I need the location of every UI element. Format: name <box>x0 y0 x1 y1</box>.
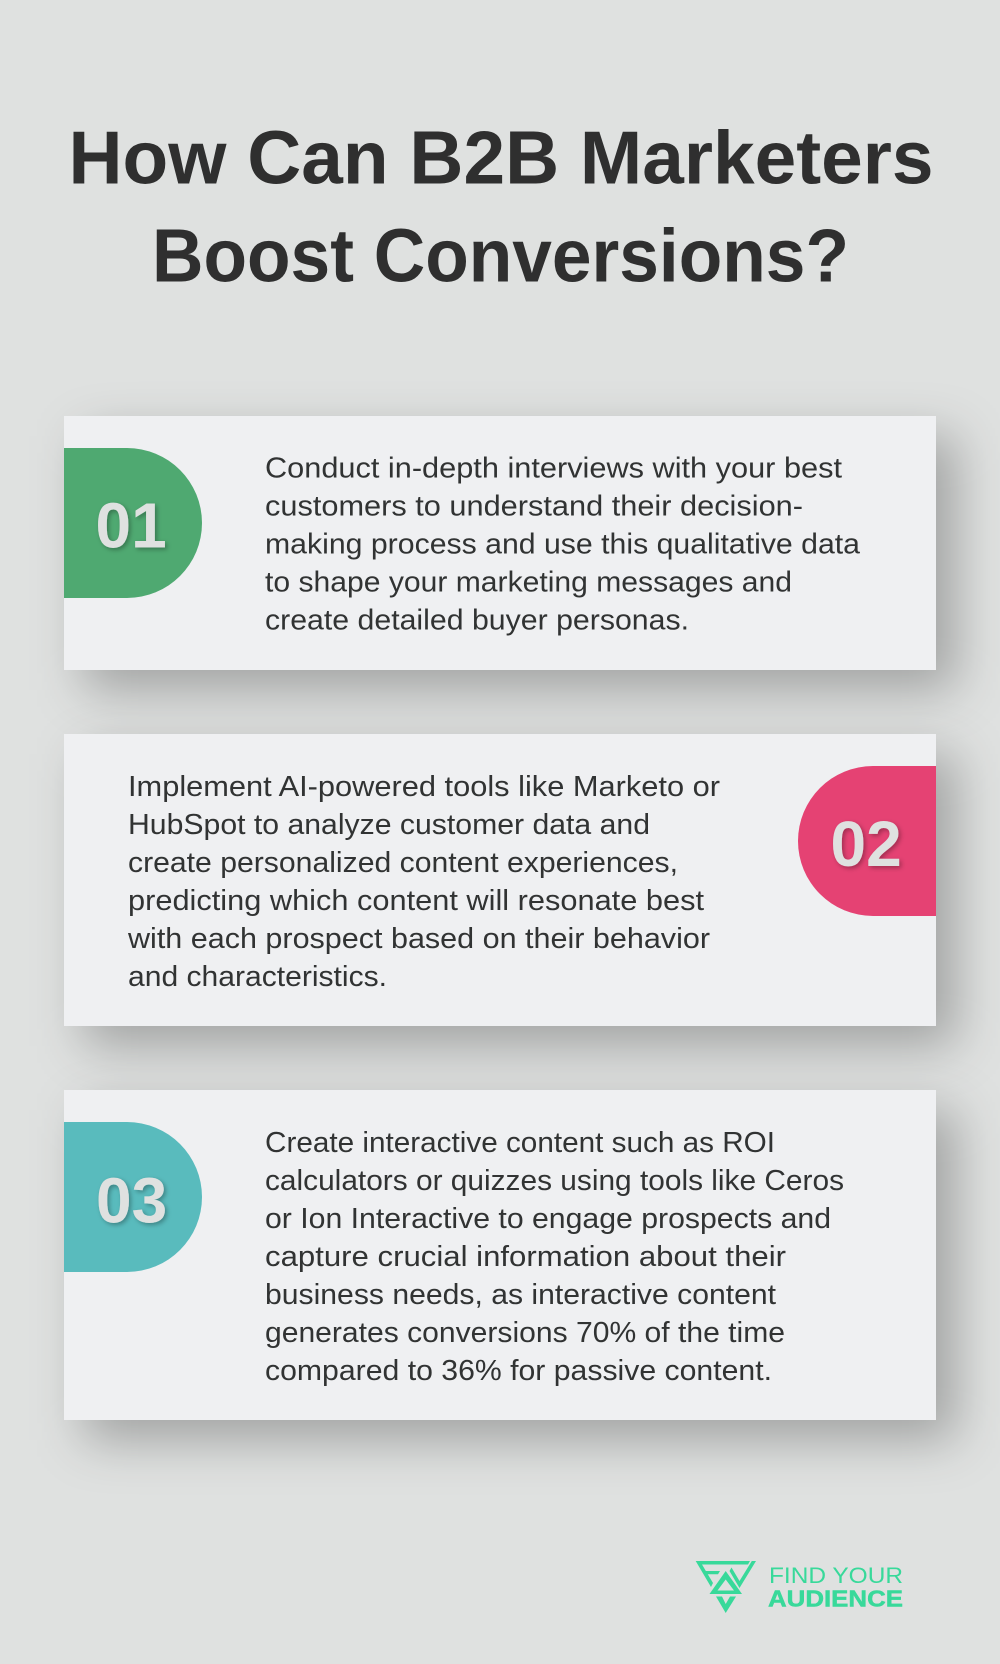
text: step 03 description: generates conversions 70% of the time <box>265 1317 785 1349</box>
text: step 02 description: HubSpot to analyze customer data and <box>128 809 650 841</box>
text: step 03 description <box>265 1127 844 1387</box>
text: step 01 description: making process and use this qualitative data <box>265 528 861 560</box>
text: step 03 description: Create interactive content such as ROI <box>265 1127 775 1159</box>
badge: 02 <box>798 766 936 916</box>
logo text: FIND YOUR <box>769 1563 903 1588</box>
text: step 02 description: and characteristics. <box>128 961 387 993</box>
badge: 02: 02 <box>830 808 902 880</box>
text: step 02 description: Implement AI-powered tools like Marketo or <box>128 771 720 803</box>
text: step 01 description: to shape your marketing messages and <box>265 566 792 598</box>
logo: Find Your Audience <box>696 1561 903 1613</box>
text: step 02 description <box>127 771 720 993</box>
title: How Can B2B Marketers <box>68 116 934 200</box>
text: step 01 description: create detailed buyer personas. <box>265 604 689 636</box>
text: step 01 description: Conduct in-depth interviews with your best <box>265 452 842 484</box>
text: step 02 description: create personalized content experiences, <box>128 847 678 879</box>
icon: triangle mark <box>696 1561 756 1613</box>
panel: step 02 <box>64 734 956 1046</box>
title <box>68 116 934 298</box>
text: step 03 description: calculators or quizzes using tools like Ceros <box>265 1165 844 1197</box>
logo text <box>768 1563 903 1612</box>
logo text: AUDIENCE <box>768 1586 903 1612</box>
text: step 02 description: with each prospect based on their behavior <box>127 923 710 955</box>
badge: 03: 03 <box>96 1164 167 1236</box>
text: step 01 description <box>265 452 861 636</box>
badge: 01 <box>64 448 202 598</box>
text: step 03 description: or Ion Interactive to engage prospects and <box>265 1203 831 1235</box>
text: step 01 description: customers to understand their decision- <box>265 490 803 522</box>
panel: step 01 <box>64 416 956 690</box>
text: step 03 description: business needs, as interactive content <box>265 1279 776 1311</box>
badge: 01: 01 <box>96 490 167 562</box>
panel: step 03 <box>64 1090 956 1440</box>
badge: 03 <box>64 1122 202 1272</box>
text: step 03 description: capture crucial information about their <box>265 1241 786 1273</box>
text: step 02 description: predicting which content will resonate best <box>128 885 704 917</box>
text: step 03 description: compared to 36% for passive content. <box>265 1355 772 1387</box>
title: Boost Conversions? <box>152 214 849 298</box>
